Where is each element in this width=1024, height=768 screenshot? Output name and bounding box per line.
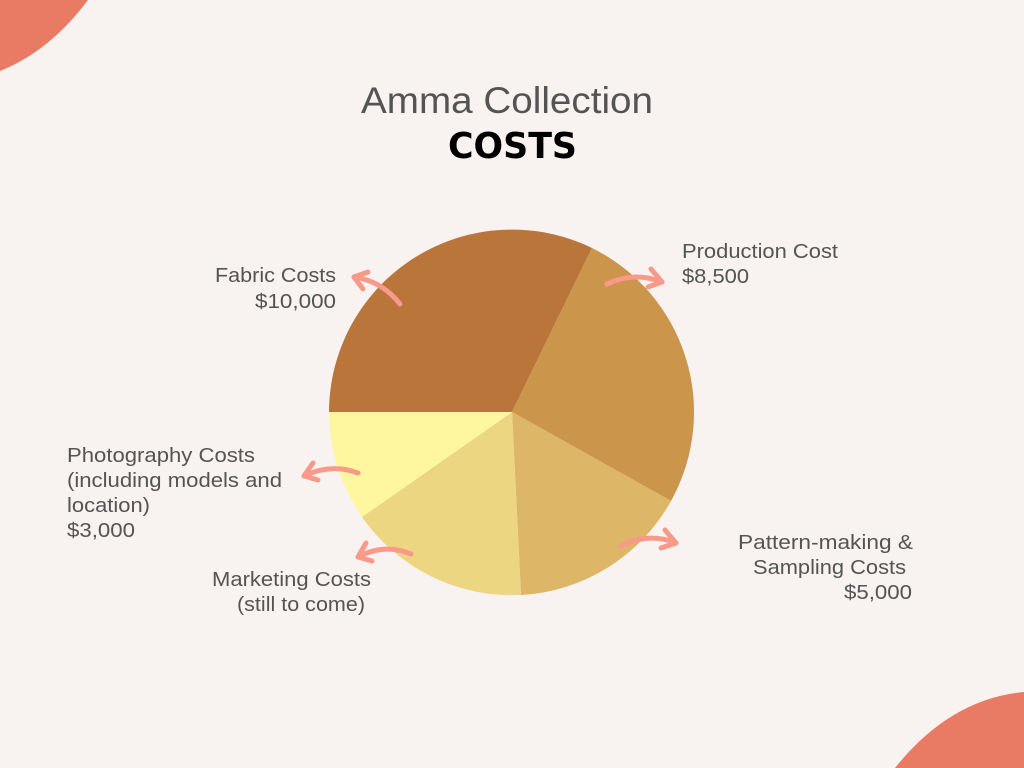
title line: costs: COSTS [448, 126, 577, 167]
corner shape: top left [0, 0, 88, 71]
slice: marketing costs [362, 412, 521, 595]
title line: collection name: Amma Collection [361, 80, 653, 121]
label: production cost: $8,500 [682, 266, 749, 288]
arrow: pattern-making and sampling costs [621, 530, 676, 548]
label: marketing costs [212, 569, 371, 616]
slice: production cost [512, 248, 694, 501]
arrow: fabric costs [354, 272, 400, 304]
slice: pattern-making and sampling costs [512, 412, 671, 595]
arrow: marketing costs [358, 543, 411, 561]
arrow: photography costs [304, 463, 358, 480]
slice: fabric costs [329, 230, 592, 412]
label: production cost: Production Cost [682, 241, 838, 263]
corner shape: bottom right [895, 692, 1024, 768]
label: fabric costs: Fabric Costs [215, 265, 336, 287]
label: photography costs [67, 445, 282, 542]
label: marketing costs: (still to come) [237, 594, 365, 616]
label: pattern-making and sampling costs: Pattern-making & [738, 532, 914, 554]
slice: photography costs [329, 412, 512, 517]
label: photography costs: (including models and [67, 470, 282, 492]
label: marketing costs: Marketing Costs [212, 569, 371, 591]
label: pattern-making and sampling costs: $5,000 [844, 582, 912, 604]
label: photography costs: location) [67, 495, 150, 517]
label: fabric costs [215, 265, 336, 313]
label: pattern-making and sampling costs [738, 532, 914, 604]
label: photography costs: $3,000 [67, 520, 135, 542]
label: photography costs: Photography Costs [67, 445, 255, 467]
title [361, 80, 653, 167]
label: pattern-making and sampling costs: Sampling Costs [753, 557, 906, 579]
arrow: production cost [607, 269, 662, 287]
pie chart [329, 230, 694, 595]
label: fabric costs: $10,000 [255, 291, 336, 313]
label: production cost [682, 241, 838, 288]
